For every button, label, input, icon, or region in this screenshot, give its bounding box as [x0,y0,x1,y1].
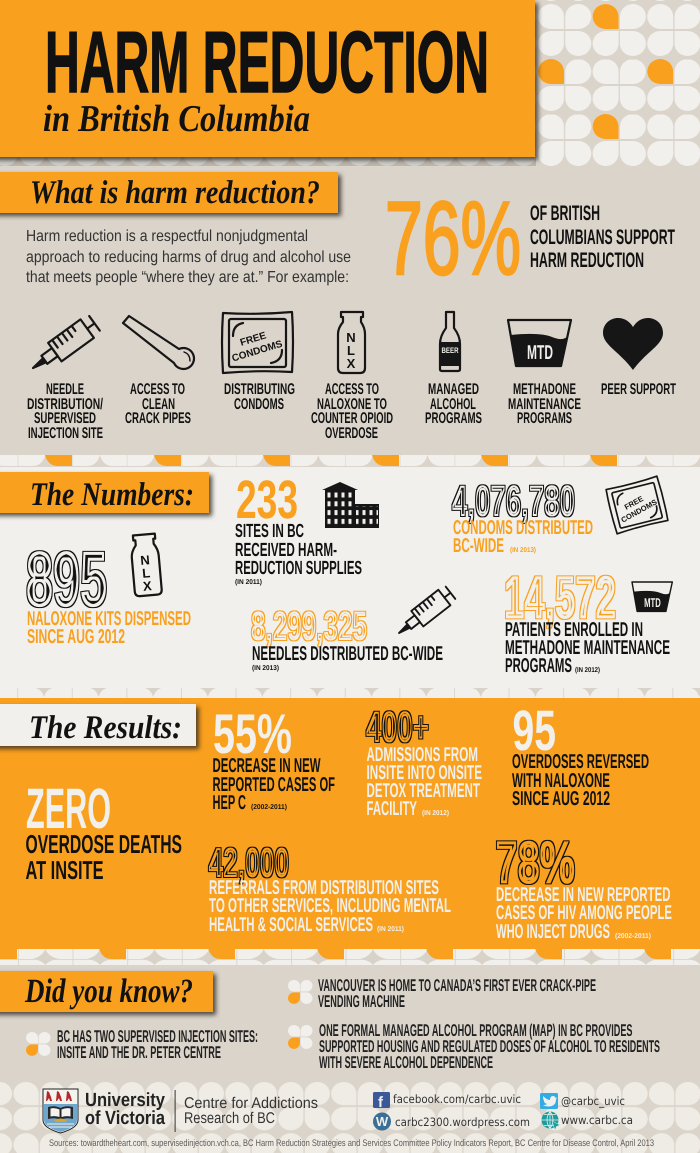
stat: 400+ admissions: DETOX TREATMENT [366,780,480,802]
stat: 4,076,780 condoms: BC-WIDE [453,535,504,557]
label: clean crack pipes: CLEAN [142,396,175,413]
icon: building [322,482,379,528]
icon: naloxone bottle [338,312,365,373]
label: clean crack pipes [125,381,191,427]
stat: 78 percent hiv: (2002-2011) [615,932,651,940]
stat: 14,572 patients: 14,572 [504,564,616,631]
stat: 8,299,325 needles [251,603,443,672]
social: facebook [373,1092,521,1111]
icon: naloxone bottle small [130,533,162,597]
label: naloxone [311,381,393,442]
stat: 78 percent hiv: WHO INJECT DRUGS [496,921,610,943]
fact: supervised injection sites: INSITE AND THE DR. PETER CENTRE [57,1043,221,1062]
results panel [0,698,700,965]
label: distributing condoms [224,381,295,413]
stat: 55 percent hep c: DECREASE IN NEW [212,755,321,777]
stat: 42,000 referrals: (IN 2011) [377,925,404,933]
subtitle: in British Columbia [43,98,310,140]
footer pattern [0,1082,700,1153]
icon: naloxone bottle: X [347,356,356,371]
label: naloxone: COUNTER OPIOID [311,410,393,427]
heading: did you know: Did you know? [24,973,193,1010]
icon: condom package small: FREE [623,495,645,512]
heading: what is harm reduction: What is harm reduction? [30,175,320,211]
stat: 400+ admissions: (IN 2012) [422,809,449,817]
logo text: of Victoria [85,1108,165,1129]
icon: condom package: CONDOMS [231,339,284,365]
stat: 42,000 referrals: 42,000 [208,839,289,886]
label: managed alcohol: PROGRAMS [425,410,482,427]
stat: 233 sites: SITES IN BC [235,521,304,542]
label: naloxone: OVERDOSE [325,425,378,442]
social: wordpress [373,1112,530,1130]
icon: naloxone bottle small: L [142,565,151,581]
fact: supervised injection sites: BC HAS TWO SUPERVISED INJECTION SITES: [57,1027,258,1046]
heading: the numbers: The Numbers: [30,477,194,513]
stat: 895 naloxone kits [26,535,191,648]
bullet icon [288,980,313,1004]
label: clean crack pipes: CRACK PIPES [125,410,191,427]
logo: university shield [43,1089,78,1133]
stat: 42,000 referrals [208,839,451,936]
icon: naloxone bottle small: X [142,578,153,594]
stat: 55 percent hep c [212,702,335,814]
stat: 400+ admissions: FACILITY [366,798,417,820]
stat: 400+ admissions: 400+ [366,703,429,752]
stat: 14,572 patients: PROGRAMS [505,655,572,677]
stat: 233 sites: REDUCTION SUPPLIES [235,558,362,579]
stat: 42,000 referrals: TO OTHER SERVICES, INCLUDING MENTAL [209,895,451,917]
stat: 55 percent hep c: (2002-2011) [251,803,287,811]
social: facebook: facebook.com/carbc.uvic [393,1092,521,1106]
label: distributing condoms: DISTRIBUTING [224,381,295,398]
fact: crack-pipe vending machine: VENDING MACHINE [318,992,405,1011]
logo text [85,1090,318,1132]
stat: 78 percent hiv: 78% [496,829,575,896]
bullet icon [26,1032,51,1056]
label: methadone: MAINTENANCE [508,396,581,413]
icon: syringe [26,314,101,377]
stat: 4,076,780 condoms: (IN 2013) [510,546,536,554]
stat: 78 percent hiv [496,829,672,943]
example labels [27,381,676,442]
heading: the numbers [0,472,209,513]
icon: syringe small [393,585,457,641]
logo text: Centre for Addictions [184,1095,318,1112]
definition paragraph: Harm reduction is a respectful nonjudgmental [26,228,308,245]
stat: 8,299,325 needles: (IN 2013) [252,664,279,672]
fact: crack-pipe vending machine [288,976,596,1011]
social: website [542,1112,633,1130]
label: distributing condoms: CONDOMS [234,396,284,413]
stat: zero overdose deaths: AT INSITE [26,855,104,885]
stat: zero overdose deaths: ZERO [26,777,111,841]
stat: 55 percent hep c: HEP C [212,792,246,814]
icon: condom package: FREE [239,330,268,349]
label: needle distribution: DISTRIBUTION/ [27,396,103,413]
logo text: University [85,1090,165,1111]
label: needle distribution: SUPERVISED [34,410,96,427]
stat: 8,299,325 needles: 8,299,325 [251,603,367,649]
icon: crack pipe [123,316,194,369]
label: needle distribution: NEEDLE [46,381,84,398]
icon: beer bottle: BEER [442,346,459,355]
stat: 8,299,325 needles: NEEDLES DISTRIBUTED BC-WIDE [252,643,443,665]
definition paragraph [26,228,351,286]
stat: zero overdose deaths: OVERDOSE DEATHS [26,829,182,859]
stat: 233 sites: 233 [236,470,298,530]
label: naloxone: NALOXONE TO [317,396,387,413]
bullet icon [288,1025,313,1049]
icon: methadone cup: MTD [527,342,553,364]
social: wordpress: W [376,1114,389,1129]
icon: naloxone bottle small: N [140,552,150,568]
stat: 76 percent: 76% [385,181,521,297]
icon: methadone cup [508,320,571,366]
label: methadone [508,381,581,427]
label: methadone: METHADONE [513,381,576,398]
icon: methadone cup small: MTD [644,596,661,610]
label: naloxone: ACCESS TO [325,381,379,398]
logo text: Research of BC [184,1110,275,1127]
stat: 895 naloxone kits: SINCE AUG 2012 [27,626,125,648]
title panel [0,0,535,157]
stat: 95 overdoses reversed: SINCE AUG 2012 [512,788,610,810]
label: methadone: PROGRAMS [517,410,572,427]
social: twitter: @carbc_uvic [561,1094,625,1108]
stat: 895 naloxone kits: 895 [26,535,107,623]
icon: methadone cup small [632,582,672,611]
social: twitter [540,1093,625,1109]
stat: 76 percent: OF BRITISH [530,202,600,225]
label: clean crack pipes: ACCESS TO [130,381,185,398]
stat: 55 percent hep c: 55% [213,702,292,765]
definition paragraph: that meets people “where they are at.” For example: [26,269,349,286]
icon: beer bottle [440,312,460,371]
label: managed alcohol [425,381,482,427]
stat: zero overdose deaths [26,777,182,885]
icon: condom package [222,312,293,373]
stat: 4,076,780 condoms: CONDOMS DISTRIBUTED [453,517,593,539]
stat: 233 sites: (IN 2011) [235,578,262,586]
icon: condom package small: CONDOMS [620,498,659,525]
fact: managed alcohol program: WITH SEVERE ALCOHOL DEPENDENCE [319,1053,493,1072]
stat: 400+ admissions: ADMISSIONS FROM [366,744,478,766]
label: managed alcohol: ALCOHOL [430,396,476,413]
icon: condom package small [605,476,669,534]
stat: 4,076,780 condoms [452,477,593,557]
stat: 42,000 referrals: REFERRALS FROM DISTRIBUTION SITES [209,877,439,899]
stat: 14,572 patients [504,564,670,677]
social: website: www.carbc.ca [561,1113,633,1127]
stat: 4,076,780 condoms: 4,076,780 [452,477,575,526]
stat: 95 overdoses reversed [512,699,649,810]
stat: 55 percent hep c: REPORTED CASES OF [212,774,335,796]
fact: supervised injection sites [26,1027,258,1062]
label: needle distribution [27,381,103,442]
stat: 400+ admissions: INSITE INTO ONSITE [366,762,482,784]
icon: heart [603,318,663,370]
fact: managed alcohol program [288,1021,660,1072]
icon: naloxone bottle: L [347,343,355,358]
label: needle distribution: INJECTION SITE [28,425,103,442]
top pattern [0,0,700,166]
social: wordpress: carbc2300.wordpress.com [395,1115,530,1129]
stat: 233 sites [235,470,362,586]
stat: 895 naloxone kits: NALOXONE KITS DISPENSED [27,608,191,630]
stat: 233 sites: RECEIVED HARM- [235,540,337,561]
definition paragraph: approach to reducing harms of drug and alcohol use [26,249,351,266]
heading: the results: The Results: [29,710,182,746]
stat: 400+ admissions [366,703,482,820]
social: facebook: f [378,1094,384,1111]
label: managed alcohol: MANAGED [428,381,479,398]
stat: 14,572 patients: (IN 2012) [575,666,600,674]
numbers panel [0,455,700,698]
stat: 95 overdoses reversed: 95 [512,699,556,763]
stat: 42,000 referrals: HEALTH & SOCIAL SERVICES [209,914,373,936]
icon: naloxone bottle: N [346,330,356,345]
stat: 95 overdoses reversed: WITH NALOXONE [512,770,610,792]
